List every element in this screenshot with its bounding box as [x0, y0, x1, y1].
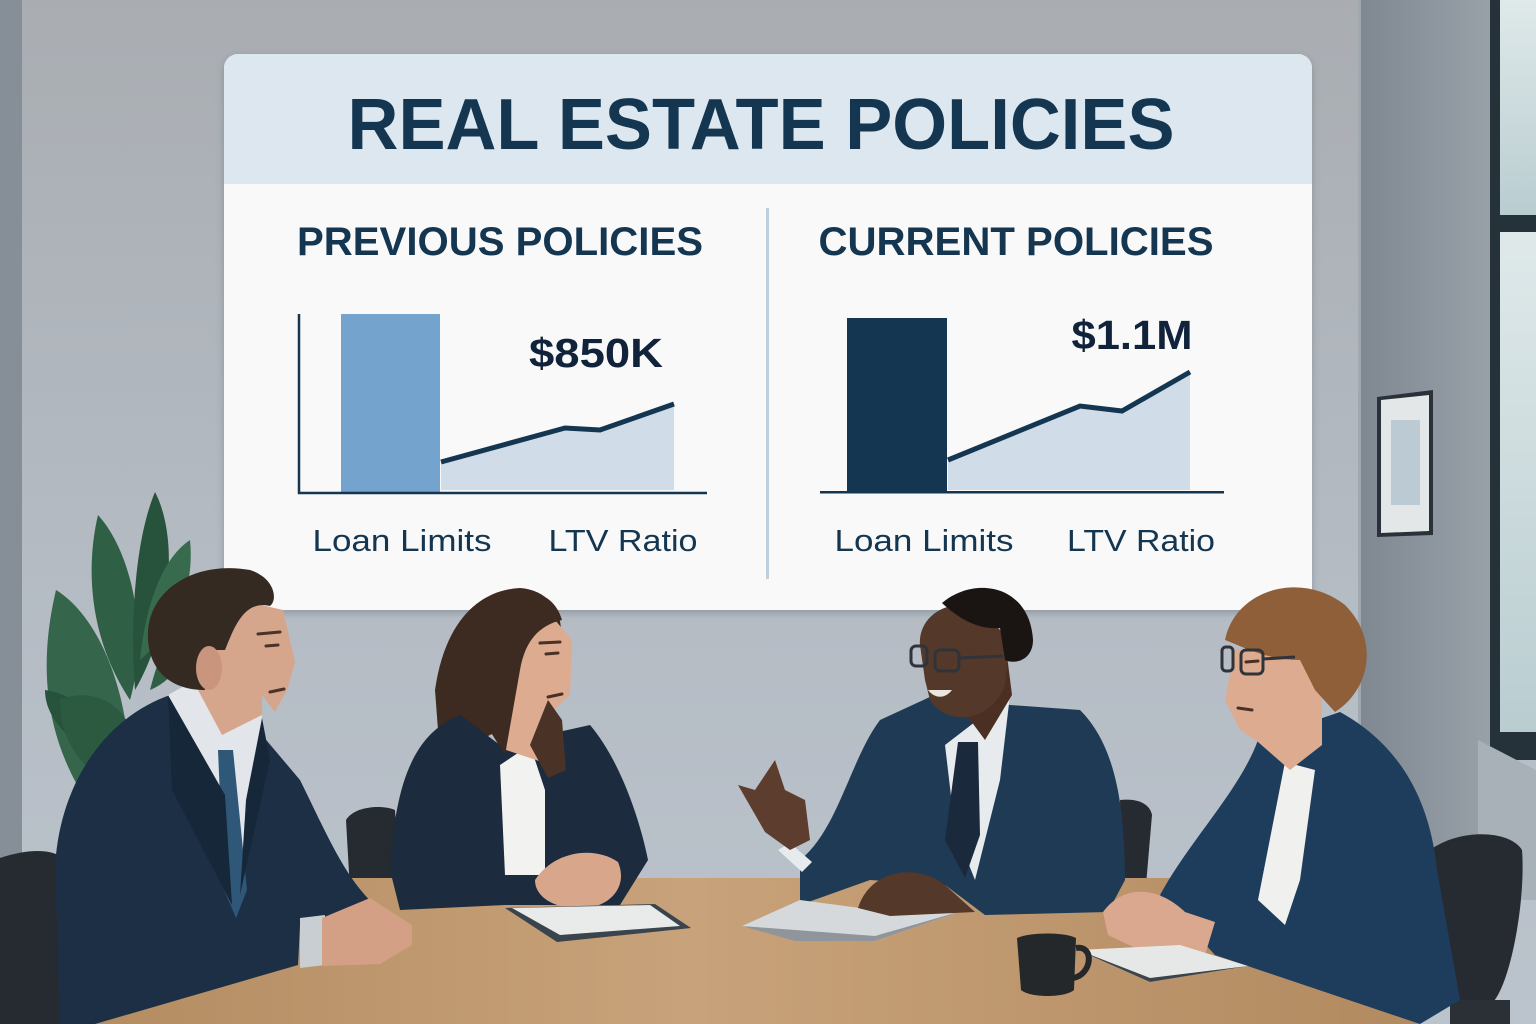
chairs [0, 800, 1523, 1024]
blazer [1160, 712, 1460, 1024]
lapels [168, 695, 232, 905]
front hair [480, 593, 562, 755]
glasses [1222, 647, 1295, 674]
notebook [1078, 945, 1248, 982]
policy board panel [224, 54, 1312, 610]
current policies heading: CURRENT POLICIES [818, 220, 1214, 264]
ear [196, 646, 222, 690]
neck [940, 640, 1012, 740]
hair [148, 568, 274, 690]
jacket [800, 690, 1125, 915]
suit [55, 695, 378, 1024]
cuff [300, 915, 325, 968]
neck and face [1225, 640, 1322, 770]
neck and face [192, 600, 295, 735]
current value: $1.1M [1072, 312, 1192, 358]
hair [942, 588, 1033, 662]
smile [928, 690, 952, 697]
previous policies heading: PREVIOUS POLICIES [297, 220, 703, 264]
tablet [505, 904, 691, 942]
previous label: loan limits: Loan Limits [312, 523, 492, 558]
potted plant [45, 492, 196, 850]
tie [945, 742, 980, 878]
shirt cuff [778, 843, 812, 872]
neck and face [506, 620, 572, 762]
back hair [435, 588, 561, 740]
panel divider [766, 208, 769, 579]
blouse [500, 745, 545, 875]
person 2: woman in dark blazer [390, 588, 648, 910]
framed wall art [1377, 390, 1433, 537]
current label: loan limits: Loan Limits [834, 523, 1014, 558]
facial features [1238, 661, 1258, 710]
person 4: woman with short hair and glasses [1103, 587, 1460, 1024]
raised hand [738, 760, 810, 850]
hair over shoulder [530, 700, 566, 778]
previous policies chart [299, 314, 707, 558]
shirt and collar [168, 680, 262, 915]
clasped hands [535, 853, 621, 908]
person 3: man with glasses gesturing [738, 588, 1125, 915]
hair [1225, 587, 1367, 712]
blazer [390, 715, 648, 910]
facial features [258, 632, 284, 692]
clasped hands [322, 898, 412, 966]
laptop [742, 900, 965, 941]
current policies chart [820, 312, 1224, 558]
clasped hands [1103, 892, 1215, 955]
hand resting on laptop [858, 872, 975, 916]
person 1: man in dark suit [55, 568, 412, 1024]
conference table [90, 878, 1420, 1024]
facial features [540, 642, 562, 697]
face [920, 604, 1010, 717]
window [1478, 0, 1536, 900]
tie [218, 750, 247, 918]
coffee mug [1017, 934, 1089, 996]
previous value: $850K [529, 330, 663, 376]
current label: LTV ratio: LTV Ratio [1067, 523, 1215, 558]
previous label: LTV ratio: LTV Ratio [548, 523, 698, 558]
board title: REAL ESTATE POLICIES [348, 85, 1174, 165]
blouse [1258, 762, 1315, 925]
glasses [911, 646, 1003, 671]
shirt [945, 695, 1010, 880]
